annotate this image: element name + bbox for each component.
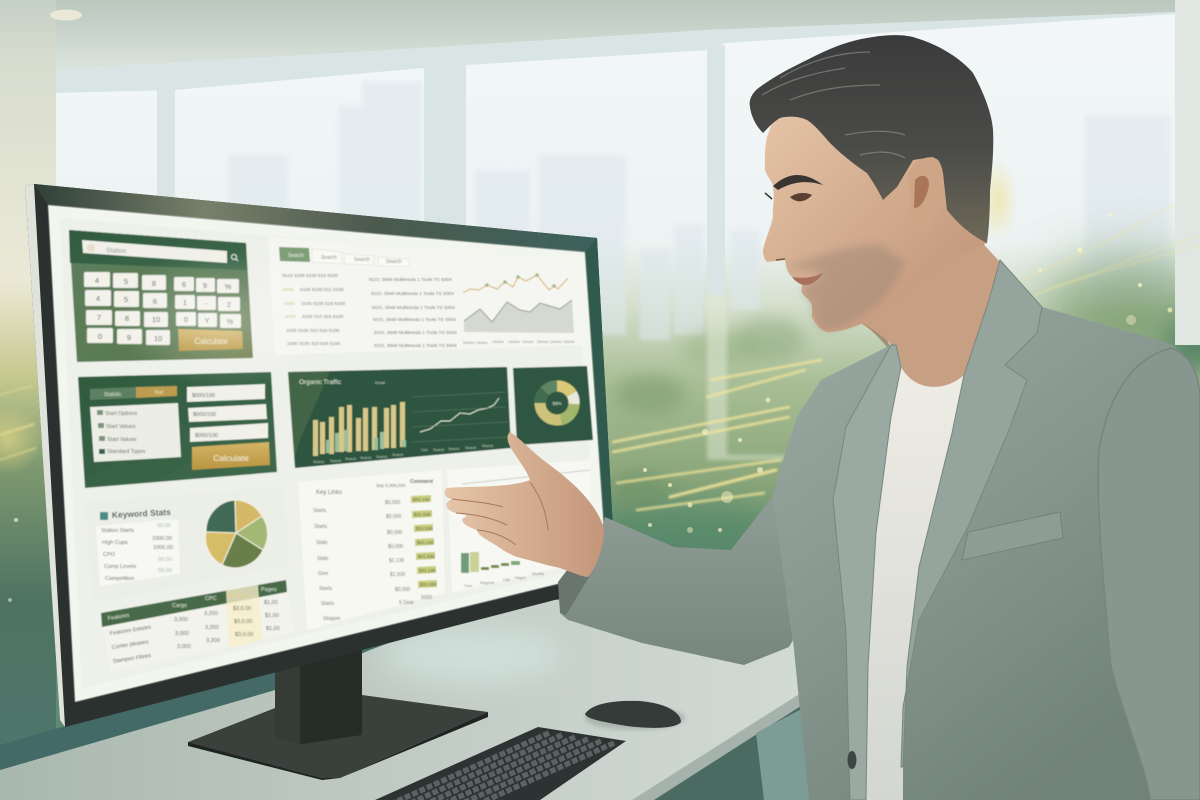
panel: lower left table: Stampes Fibres — [112, 653, 152, 665]
keypad labels: % — [225, 282, 232, 291]
search field: Station — [106, 247, 127, 255]
stats list: 1000.00 — [152, 536, 172, 542]
keypad labels: % — [227, 317, 234, 326]
panel: organic traffic chart: Email — [375, 380, 385, 385]
monitor frame — [25, 184, 616, 727]
right lapel — [901, 260, 1042, 767]
bokeh lights — [8, 213, 1172, 602]
panel: keyword table: $31,530 — [420, 582, 437, 587]
calculate button — [192, 442, 270, 470]
mouth — [792, 273, 823, 285]
panel: top data table and line chart — [268, 237, 585, 355]
panel: donut chart: 58% — [552, 401, 562, 406]
distant buildings — [228, 82, 1170, 340]
panel: lower left table: 3,000 — [175, 631, 189, 637]
panel: calculator — [69, 230, 253, 362]
tabs: Search — [321, 255, 337, 261]
search field — [82, 240, 238, 263]
trend line: Search — [482, 444, 493, 448]
panel: keyword table: $0,000 — [388, 544, 404, 550]
panel: lower left table: Conter pleases — [111, 639, 149, 651]
panel: keyword table: $31,530 — [416, 526, 433, 531]
panel: keyword table: Give — [318, 571, 328, 577]
table text: 5GO, 3948 Multimeda 1 Tools TS 5004 — [371, 291, 454, 297]
donut — [540, 386, 574, 420]
breast pocket — [962, 512, 1063, 560]
keypad labels: 4 — [96, 294, 100, 303]
table text: 5100 5100 511 5100 — [300, 287, 344, 293]
bar chart: Search — [345, 457, 356, 461]
table text: 4000 — [285, 314, 296, 320]
bar chart: Search — [360, 456, 371, 460]
panel: keyword stats and pie — [85, 487, 290, 603]
panel: lower left table: 3,200 — [205, 625, 219, 631]
calculate button: Calculate — [194, 337, 228, 346]
panel: keyword table: $0,000 — [387, 530, 403, 536]
line chart: 54/mm — [537, 340, 549, 344]
jacket button — [848, 751, 856, 769]
stats list: 50.00 — [158, 568, 172, 574]
keypad labels: 0 — [98, 332, 102, 341]
panel: organic traffic chart — [288, 367, 511, 468]
keypad labels: Y — [204, 316, 210, 325]
stats list: 50.00 — [157, 523, 171, 529]
desk — [0, 600, 809, 800]
panel: lower left table: 3,000 — [174, 617, 188, 623]
panel: lower left table: Summary — [227, 593, 251, 599]
panel title: Organic Traffic — [299, 379, 342, 386]
panel: small bar chart: Pages — [515, 576, 526, 580]
line chart: 14/mm — [550, 340, 562, 344]
panel: lower left table: 3,200 — [206, 638, 220, 644]
trend line: Search — [465, 446, 476, 450]
panel: keyword table: Sep 5,000,000 — [376, 483, 406, 488]
panel: keyword table: $1,500 — [390, 572, 406, 578]
gold light streaks — [0, 205, 1200, 510]
heading: Keyword Stats — [112, 507, 171, 520]
bar chart — [313, 402, 406, 464]
tabs: Search — [288, 253, 304, 259]
panel: small bar chart — [447, 460, 593, 593]
bar chart: Search — [313, 460, 324, 464]
keypad labels: 6 — [153, 297, 157, 306]
keypad labels: - — [205, 299, 208, 308]
list box: Start Options — [105, 411, 137, 417]
list box — [90, 403, 181, 462]
keypad labels: 8 — [152, 279, 156, 288]
panel: keyword table: Stopper — [323, 616, 341, 622]
panel: lower left table: $1,00 — [264, 600, 278, 606]
panel: lower left table: 3,000 — [177, 644, 191, 650]
table text: 5543 3100 5100 516 5100 — [282, 273, 338, 279]
line chart: 54/mm — [463, 341, 475, 345]
keypad labels: 9 — [203, 281, 207, 290]
keypad — [84, 272, 241, 345]
eye — [790, 193, 812, 201]
left lapel — [833, 345, 901, 800]
table text: 5000 — [283, 287, 294, 293]
panel: small bar chart: Tues — [464, 584, 472, 588]
panel: keyword table: Comment — [410, 479, 433, 485]
man — [445, 35, 1200, 800]
list box: Start Values — [107, 437, 137, 443]
panel: keyword table: $0,000 — [385, 500, 401, 506]
panel: inputs — [78, 372, 277, 488]
bar chart: Search — [392, 453, 403, 457]
keypad labels: 10 — [152, 315, 160, 324]
line chart: 14/mm — [563, 340, 575, 344]
panel: keyword table: 5000 — [421, 595, 432, 601]
table text: 5GO, 3948 Multimeda 1 Tools TS 5004 — [369, 277, 452, 283]
torso jacket — [772, 260, 1200, 800]
line chart: 14/mm — [508, 340, 520, 344]
panel: lower left table: Features — [107, 613, 130, 622]
panel: lower left table: $3,0.00 — [234, 619, 252, 625]
cuff — [558, 530, 603, 615]
bar chart: Search — [330, 459, 341, 463]
table text: 1500 3100 310 516 5100 — [286, 328, 340, 334]
panel: lower left table: $3,0.00 — [235, 632, 253, 638]
line chart: 14/mm — [492, 340, 504, 344]
input fields — [187, 384, 268, 442]
panel: lower left table: Pages — [261, 587, 277, 593]
panel: keyword table: $41,530 — [418, 554, 435, 559]
monitor screen — [48, 205, 607, 702]
table text: 1500 3100 310 516 5100 — [287, 341, 341, 347]
dropdown tabs: Test — [154, 390, 164, 396]
panel: small bar chart: Magnets — [480, 581, 495, 585]
panel: lower left table — [101, 580, 295, 672]
stats list — [96, 519, 180, 586]
keypad labels: 7 — [97, 313, 101, 322]
table text — [282, 273, 457, 349]
panel: lower left table: CPC — [205, 596, 217, 602]
hair — [750, 35, 993, 243]
tabs: Search — [386, 259, 402, 265]
ceiling light — [50, 10, 82, 20]
stats list: High Cups — [102, 540, 128, 546]
stats list: Competition — [105, 576, 134, 582]
bar chart: Search — [376, 455, 387, 459]
trend line: Search — [433, 448, 444, 452]
input fields: $000/100 — [195, 433, 218, 439]
keypad labels: 8 — [125, 314, 129, 323]
table text: 5GO, 3948 Multimeda 1 Tools TS 5004 — [374, 343, 457, 349]
stats list: 50.00 — [158, 557, 172, 563]
panel: keyword table: $41,140 — [413, 497, 430, 502]
panel: small bar chart: Mozilla — [532, 572, 545, 576]
nostril — [776, 259, 785, 260]
ceiling — [0, 0, 1200, 70]
calculate button — [178, 329, 243, 351]
keypad labels: 5 — [124, 295, 128, 304]
tabs — [279, 247, 409, 266]
keypad labels: 9 — [127, 333, 131, 342]
panel: keyword table: Stats — [317, 556, 329, 562]
panel: small bar chart: Lifts — [503, 578, 510, 582]
panel: keyword table: $0,000 — [386, 514, 402, 520]
ear — [908, 157, 944, 232]
window frames — [55, 0, 1200, 408]
lower window frame ghost — [707, 295, 787, 460]
monitor stand — [188, 648, 488, 780]
panel: keyword table — [298, 470, 445, 630]
panel: lower left table: $3,0.00 — [233, 606, 251, 612]
keypad labels: 0 — [184, 315, 188, 324]
stats list: Comp Levels — [104, 564, 136, 570]
table text: 3100 5100 516 5100 — [301, 301, 345, 307]
panel: keyword table: Stats — [316, 540, 328, 546]
panel: keyword table: $31,530 — [414, 512, 431, 517]
table text: 5GO, 3948 Multimeda 1 Tools TS 5004 — [374, 330, 457, 336]
highlighted values — [411, 495, 437, 588]
trend line — [413, 392, 510, 452]
panel: keyword table: Starts — [319, 586, 333, 592]
tabs: Search — [354, 257, 370, 263]
dark window under monitor — [0, 612, 470, 770]
panel: lower left table: $1,00 — [266, 626, 280, 632]
left wall — [0, 0, 56, 800]
input fields: $000/100 — [193, 412, 216, 418]
jaw shadow — [863, 323, 908, 385]
panel: keyword table: 5 Deal — [399, 600, 413, 606]
calculate button: Calculate — [213, 453, 249, 463]
stats list: CPO — [103, 552, 116, 558]
trend line: Search — [448, 447, 459, 451]
dropdown tabs — [90, 386, 177, 400]
stubble — [787, 245, 905, 332]
table text: 4460 — [284, 301, 295, 307]
panel: keyword table: $31,130 — [419, 568, 436, 573]
keypad labels: 1 — [183, 298, 187, 307]
keypad labels: 10 — [154, 334, 162, 343]
panel: lower left table: Features Estates — [109, 625, 152, 637]
neck — [860, 235, 1000, 392]
foliage haze — [570, 260, 1200, 580]
list box: Standard Types — [107, 449, 146, 455]
panel: keyword table: $0,000 — [395, 587, 411, 593]
screen glare — [115, 250, 335, 390]
input fields: $000/100 — [192, 393, 215, 399]
table text: 3100 310 316 5100 — [302, 314, 344, 320]
panel: lower left table: 3,200 — [204, 611, 218, 617]
panel: lower left table: Cargo — [172, 603, 187, 609]
panel: lower left table: $1,00 — [265, 613, 279, 619]
panel: keyword table: Starts — [313, 508, 327, 514]
eyebrow — [773, 175, 823, 190]
keypad labels: 5 — [124, 277, 128, 286]
trend line: Line — [421, 448, 428, 452]
table text: 5GO, 3948 Multimeda 1 Tools TS 5004 — [372, 305, 455, 311]
list box: Start Values — [106, 424, 136, 430]
panel: keyword table: Starts — [314, 524, 328, 530]
face and head — [763, 100, 987, 332]
keypad labels: 4 — [95, 276, 99, 285]
panel: keyword table: Starts — [321, 601, 335, 607]
mouse — [585, 701, 685, 730]
stats list: Station Starts — [101, 528, 134, 534]
keypad labels — [95, 276, 234, 343]
sleeve arm — [560, 497, 793, 665]
t-shirt — [866, 367, 964, 800]
panel: keyword table: $1,130 — [389, 558, 405, 564]
hair highlights — [762, 52, 905, 158]
panel: keyword table: $41,140 — [417, 540, 434, 545]
panel: donut chart — [513, 366, 593, 445]
keyboard — [353, 727, 626, 800]
keypad labels: 2 — [227, 300, 231, 309]
stats list: 1000.00 — [153, 545, 173, 551]
hand — [445, 432, 604, 577]
table text: 5GO, 3948 Multimeda 1 Tools TS 5004 — [373, 317, 456, 323]
panel: keyword table: Key Links — [316, 490, 342, 496]
dropdown tabs: Statistic — [104, 392, 122, 398]
keypad labels: 6 — [182, 280, 186, 289]
icon: search — [232, 254, 238, 261]
line chart — [463, 273, 575, 345]
right sleeve — [1098, 348, 1200, 800]
line chart: 14/mm — [476, 341, 488, 345]
pie chart — [205, 500, 268, 568]
line chart: 14/mm — [522, 340, 534, 344]
